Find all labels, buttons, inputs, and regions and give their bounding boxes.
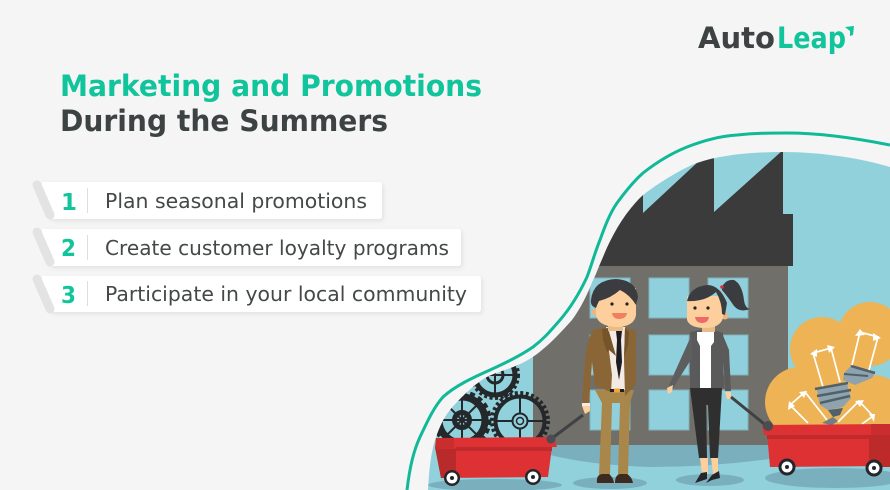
green curve outline [407, 133, 890, 490]
man: shoes [597, 474, 633, 483]
man: jacket [582, 327, 636, 403]
list item 1: Plan seasonal promotions [105, 189, 367, 213]
woman: shoes [695, 471, 720, 483]
list item 2: 2 [61, 236, 76, 262]
list item 1 [37, 182, 382, 219]
list item 1: 1 [61, 190, 77, 216]
right wagon [762, 421, 890, 488]
title: During the Summers [60, 104, 388, 138]
list item 3: Participate in your local community [105, 282, 467, 306]
man: shirt [606, 327, 626, 390]
list of promotion tips [37, 182, 481, 312]
list item 3: 3 [61, 283, 76, 309]
man: hair [591, 279, 638, 308]
factory building [533, 150, 793, 445]
title: Marketing and Promotions [60, 69, 482, 103]
man: tie [616, 331, 622, 380]
woman: jacket [690, 330, 724, 388]
list item 3 [37, 276, 481, 312]
left wagon [428, 415, 583, 490]
logo: AutoLeap: Leap [777, 21, 846, 55]
gears [436, 365, 550, 438]
bulb filaments [790, 332, 878, 424]
woman: trousers [690, 388, 722, 458]
logo: AutoLeap: Auto [698, 21, 775, 55]
list item 2 [37, 229, 461, 266]
man [573, 279, 647, 489]
central bulb base [817, 384, 851, 410]
title [60, 69, 482, 138]
man: trousers [595, 390, 634, 475]
man: face [596, 288, 636, 327]
upper bulb base [843, 366, 875, 385]
illustration panel [428, 152, 890, 490]
light bulbs [765, 302, 890, 425]
woman [667, 280, 768, 486]
man: lapels [602, 328, 629, 358]
woman: face [687, 296, 723, 328]
list item 2: Create customer loyalty programs [105, 236, 449, 260]
woman: hair [687, 285, 727, 315]
man: belt [610, 389, 624, 392]
logo: AutoLeap [698, 21, 854, 55]
woman: ponytail [722, 280, 750, 310]
ground band [551, 445, 770, 467]
